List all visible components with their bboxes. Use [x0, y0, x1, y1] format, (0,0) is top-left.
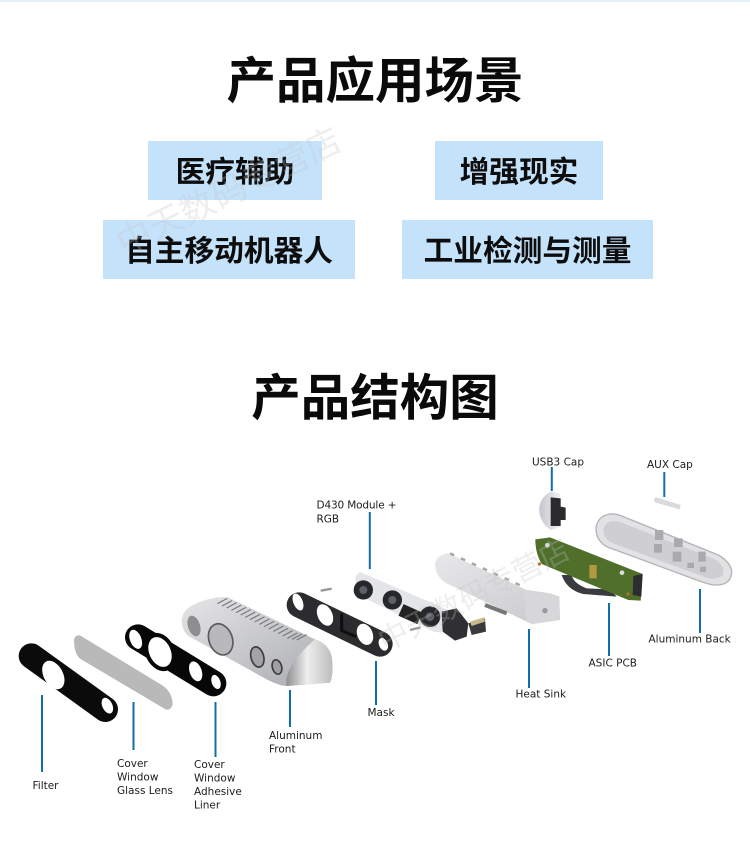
- tag: augmented reality: [435, 141, 603, 200]
- part: cover window adhesive liner: [127, 628, 223, 690]
- part: cover window glass lens: [74, 635, 173, 710]
- labels: [32, 456, 732, 812]
- title: product structure: 产品结构图: [251, 371, 499, 426]
- labels: USB3 Cap: [532, 456, 584, 468]
- tag: autonomous mobile robots: 自主移动机器人: [125, 235, 333, 268]
- labels: Mask: [368, 707, 395, 719]
- labels: Cover: [117, 758, 148, 770]
- part: aluminum front: [182, 597, 333, 686]
- labels: Window: [194, 772, 236, 784]
- part: filter: [31, 656, 115, 715]
- part: ASIC PCB: [535, 537, 643, 601]
- part: D430 module: [354, 572, 486, 641]
- labels: Filter: [32, 780, 59, 792]
- part: aluminum back: [596, 514, 732, 585]
- part group: left half: [31, 597, 333, 715]
- tag: industrial inspection and measurement: 工业检测与测量: [424, 235, 631, 268]
- tag: autonomous mobile robots: [103, 220, 355, 279]
- title: application scenarios: 产品应用场景: [226, 54, 524, 109]
- tag: augmented reality: 增强现实: [460, 156, 578, 189]
- labels: Front: [269, 744, 296, 756]
- labels: Glass Lens: [117, 785, 173, 797]
- labels: D430 Module +: [316, 500, 396, 512]
- labels: Cover: [194, 759, 225, 771]
- part: heat sink: [435, 553, 560, 624]
- part: screws: [321, 589, 421, 630]
- tag: medical assistance: [148, 141, 322, 200]
- labels: ASIC PCB: [588, 658, 637, 670]
- vent slots: [217, 598, 307, 640]
- labels: Adhesive: [194, 786, 242, 798]
- labels: Heat Sink: [516, 688, 567, 700]
- tag: medical assistance: 医疗辅助: [176, 156, 294, 189]
- watermark: upper: 中天数码专营店: [110, 121, 348, 263]
- part: mask: [290, 592, 390, 652]
- top accent line: [0, 0, 750, 2]
- leader lines: [42, 467, 700, 772]
- labels: Window: [117, 772, 159, 784]
- watermark: lower: 中天数码专营店: [373, 533, 575, 658]
- labels: RGB: [316, 514, 339, 526]
- part: AUX cap: [654, 497, 681, 509]
- labels: Aluminum Back: [648, 634, 732, 646]
- part: USB3 cap: [539, 492, 566, 530]
- labels: Liner: [194, 800, 221, 812]
- labels: AUX Cap: [647, 459, 693, 471]
- tag: industrial inspection and measurement: [402, 220, 653, 279]
- labels: Aluminum: [269, 730, 322, 742]
